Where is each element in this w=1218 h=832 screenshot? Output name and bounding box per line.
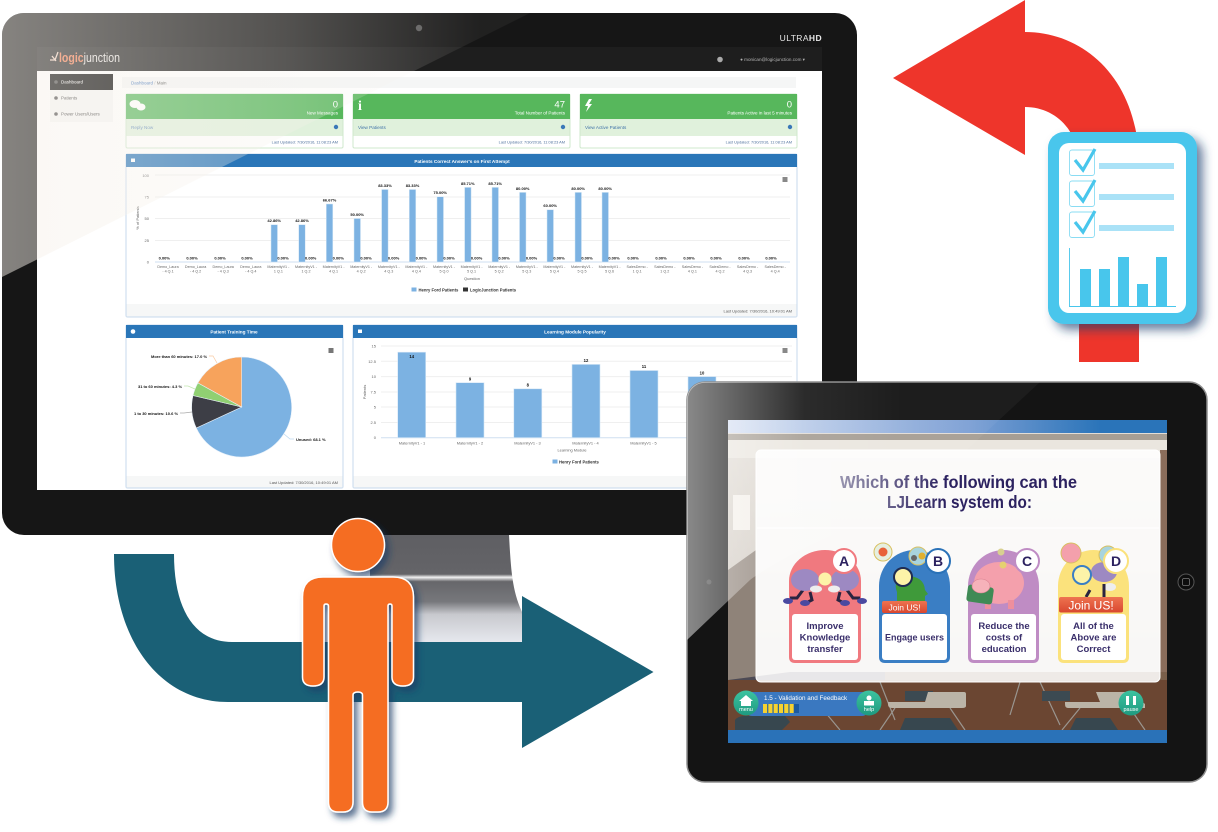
classroom desks xyxy=(735,682,1145,730)
panel: patients correct answers chart: % of Patients xyxy=(135,206,140,230)
answer letter B: B xyxy=(933,553,943,569)
arrow: red curved arrow xyxy=(893,0,1139,362)
screen background xyxy=(37,70,822,490)
panel: patients correct answers chart xyxy=(126,154,797,317)
y axis labels: 50 xyxy=(145,216,150,221)
x axis category labels: MaternityV1 - xyxy=(323,265,345,269)
answer card D xyxy=(1058,543,1129,663)
document page xyxy=(1059,143,1186,313)
answer text C: Reduce the xyxy=(978,621,1030,632)
x axis category labels: 5 Q.2 xyxy=(495,270,504,274)
card: total patients: Total Number of Patients xyxy=(515,110,566,116)
y axis labels xyxy=(368,344,377,440)
user menu: ● monican@logicjunction.com ▾ xyxy=(740,57,806,62)
answer text C: costs of xyxy=(986,632,1023,644)
x axis category labels: SalesDemo - xyxy=(654,265,676,269)
x axis labels: MaternityV1 - 2 xyxy=(457,440,483,446)
arrow: teal curved arrow xyxy=(114,554,654,748)
bar value labels: 0.00% xyxy=(471,256,483,260)
pie labels: 1 to 30 minutes: 10.6 % xyxy=(134,411,178,416)
bar value labels: 0.00% xyxy=(333,256,344,260)
x axis category labels: Demo_Laura xyxy=(240,265,262,269)
bar value labels: 42.86% xyxy=(267,218,281,223)
x axis category labels: 1 Q.2 xyxy=(660,270,669,274)
pie connectors xyxy=(180,356,294,439)
x axis category labels: MaternityV1 - xyxy=(350,265,373,269)
bar value labels: 0.00% xyxy=(443,256,455,260)
card: active patients xyxy=(580,94,797,148)
pause button: pause xyxy=(1124,707,1138,713)
x axis category labels: Demo_Laura xyxy=(185,265,207,269)
panel: patient training time pie chart xyxy=(126,325,343,488)
answer letter A: A xyxy=(839,553,849,569)
pie labels: Unused: 68.1 % xyxy=(296,437,326,442)
card: new messages xyxy=(126,94,343,148)
bar value labels: 66.67% xyxy=(323,198,337,202)
bar value labels: 0.00% xyxy=(710,256,722,260)
x axis category labels: - 4 Q.4 xyxy=(245,270,256,274)
tablet body xyxy=(687,382,1207,782)
tablet glass glare xyxy=(687,382,1040,640)
illustration: piggy bank xyxy=(966,548,1024,609)
x axis category labels xyxy=(157,265,787,274)
bar value labels: 0.00% xyxy=(186,256,198,260)
y axis labels: 12.5 xyxy=(368,359,377,364)
card: total patients: View Patients xyxy=(358,125,386,130)
classroom background xyxy=(728,420,1175,743)
illustration: bulb and brain xyxy=(1061,543,1117,597)
bar value labels: 80.00% xyxy=(516,186,530,191)
answer text A xyxy=(800,622,850,652)
card: total patients: 47 xyxy=(554,100,565,110)
x axis category labels: MaternityV1 - xyxy=(405,265,428,269)
answer text C xyxy=(979,622,1030,652)
bar value labels: 8 xyxy=(527,382,530,388)
menu button: menu xyxy=(739,707,753,713)
bar value labels: 50.00% xyxy=(350,212,364,217)
bar value labels: 0.00% xyxy=(738,256,750,260)
x axis category labels: SalesDemo - xyxy=(737,265,759,269)
pie labels: More than 60 minutes: 17.0 % xyxy=(151,354,207,359)
x axis category labels: 4 Q.2 xyxy=(357,270,366,274)
answer text D: Above are xyxy=(1071,632,1116,644)
x axis category labels: MaternityV1 - xyxy=(543,265,566,269)
card: total patients: i xyxy=(358,99,362,114)
answer text A: transfer xyxy=(807,644,843,655)
x axis category labels: MaternityV1 - xyxy=(461,265,483,269)
bar value labels: 0.00% xyxy=(655,256,667,260)
answer letter D: D xyxy=(1111,553,1121,569)
card: active patients: Last Updated: 7/30/2016, 11:08:23 AM xyxy=(726,140,792,144)
x axis category labels: 5 Q.1 xyxy=(467,270,476,274)
x axis labels: MaternityV1 - 1 xyxy=(399,440,425,446)
breadcrumb: Dashboard / Main xyxy=(131,80,167,86)
pie labels xyxy=(134,354,326,442)
answer text A: Knowledge xyxy=(800,632,850,644)
icon: checklist and chart document xyxy=(1048,132,1197,324)
tablet xyxy=(687,382,1207,782)
x axis category labels: 4 Q.4 xyxy=(771,270,780,274)
panel: patients correct answers chart: Question xyxy=(464,276,480,281)
grid lines xyxy=(381,346,792,422)
x axis category labels: 4 Q.4 xyxy=(412,270,421,274)
brand label: ULTRAHD xyxy=(780,33,822,43)
bar value labels: 0.00% xyxy=(581,256,593,260)
x axis category labels: 4 Q.1 xyxy=(329,270,338,274)
bar value labels: 83.33% xyxy=(378,183,392,188)
person figure xyxy=(302,518,414,812)
top navigation bar xyxy=(37,47,822,71)
answer letter C: C xyxy=(1022,553,1032,569)
x axis category labels: MaternityV1 - xyxy=(433,265,456,269)
y axis labels xyxy=(142,173,150,264)
legend: Henry Ford Patients xyxy=(559,459,599,464)
bar value labels: 0.00% xyxy=(277,256,289,260)
bar value labels: 0.00% xyxy=(683,256,695,260)
pie slices xyxy=(192,357,292,457)
bar value labels: 0.00% xyxy=(214,256,226,260)
card: new messages: Last Updated: 7/30/2016, 11:08:23 AM xyxy=(272,140,338,144)
illustration: brains and bulb xyxy=(783,569,867,606)
monitor xyxy=(2,13,857,535)
y axis labels: 100 xyxy=(142,173,150,178)
x axis category labels: 1 Q.1 xyxy=(633,270,642,274)
bar value labels: 0.00% xyxy=(627,256,639,260)
x axis category labels: 5 Q.0 xyxy=(439,270,449,274)
panel: patients correct answers chart: Last Updated: 7/30/2016, 10:49:01 AM xyxy=(724,308,792,314)
bar value labels: 60.00% xyxy=(543,203,557,208)
bar value labels: 0.00% xyxy=(553,256,565,260)
bar value labels: 80.00% xyxy=(571,186,585,191)
x axis category labels: Demo_Laura xyxy=(157,265,180,269)
bar value labels: 0.00% xyxy=(765,256,777,260)
question panel xyxy=(756,450,1160,682)
bar value labels: 42.86% xyxy=(295,218,309,223)
bar value labels xyxy=(409,354,705,388)
x axis category labels: MaternityV1 - xyxy=(488,265,511,269)
bar value labels: 14 xyxy=(409,354,415,359)
answer card A xyxy=(783,549,867,663)
x axis category labels: - 4 Q.1 xyxy=(162,270,174,274)
x axis labels: MaternityV1 - 6 xyxy=(688,440,715,446)
panel: patient training time pie chart: Last Updated: 7/30/2016, 10:49:01 AM xyxy=(270,480,338,485)
card: total patients: Last Updated: 7/30/2016, 11:08:23 AM xyxy=(499,140,565,144)
answer card C xyxy=(966,548,1039,663)
x axis category labels: 4 Q.3 xyxy=(743,270,752,274)
answer text D xyxy=(1070,622,1116,652)
x axis category labels: SalesDemo - xyxy=(709,265,731,269)
person head xyxy=(332,518,384,572)
y axis labels: 7.5 xyxy=(370,390,377,394)
bars xyxy=(271,187,608,262)
sidebar: Patients xyxy=(61,96,78,100)
dashboard screen xyxy=(37,47,822,490)
pause button xyxy=(1118,690,1144,716)
bar value labels: 9 xyxy=(469,376,472,382)
sidebar xyxy=(50,74,113,122)
y axis labels: 0 xyxy=(147,260,150,264)
card: new messages: Reply Now xyxy=(131,125,154,130)
join banner B: Join US! xyxy=(888,602,921,612)
y axis labels: 25 xyxy=(145,238,150,243)
logo: logicjunction xyxy=(59,50,120,65)
answer text C: education xyxy=(982,644,1027,655)
legend xyxy=(412,287,517,292)
bar value labels: 0.00% xyxy=(416,256,427,260)
x axis labels: Learning Module xyxy=(558,448,586,452)
x axis category labels: MaternityV1 - xyxy=(267,265,290,269)
x axis category labels: 5 Q.6 xyxy=(605,270,614,274)
monitor glass glare xyxy=(2,13,530,277)
x axis category labels: 4 Q.2 xyxy=(715,270,725,274)
bar value labels: 0.00% xyxy=(241,256,253,260)
question title: LJLearn system do: xyxy=(887,492,1032,512)
x axis category labels: 1 Q.2 xyxy=(301,270,311,274)
panel: learning module popularity bar chart xyxy=(353,325,797,488)
bar value labels: 85.71% xyxy=(488,181,502,186)
menu button xyxy=(734,690,758,716)
help button xyxy=(856,690,882,716)
bar value labels xyxy=(159,181,777,260)
x axis category labels: - 4 Q.2 xyxy=(190,270,201,274)
x axis category labels: 4 Q.3 xyxy=(384,270,393,274)
camera xyxy=(416,25,422,31)
illustration: head and bulb xyxy=(874,543,928,601)
join banner D: Join US! xyxy=(1068,598,1114,612)
answer text D: All of the xyxy=(1073,621,1114,632)
y axis labels: 75 xyxy=(145,194,150,200)
bar value labels: 10 xyxy=(700,370,705,376)
x axis category labels: MaternityV1 - xyxy=(599,265,621,269)
top blue bar xyxy=(728,420,1167,433)
checklist rows xyxy=(1070,149,1174,238)
x axis category labels: 5 Q.3 xyxy=(522,270,531,274)
card: new messages: 0 xyxy=(333,100,338,110)
monitor stand xyxy=(370,535,522,642)
home button xyxy=(1178,574,1194,590)
answer card B xyxy=(874,543,950,663)
panel: patients correct answers chart: Patients Correct Answer's on First Attempt xyxy=(414,159,510,164)
progress bar xyxy=(746,692,868,716)
pie labels: 31 to 60 minutes: 4.3 % xyxy=(138,384,182,389)
y axis labels: 15 xyxy=(372,344,377,348)
question title xyxy=(840,472,1077,512)
x axis category labels: - 4 Q.3 xyxy=(218,270,229,274)
bar value labels: 0.00% xyxy=(608,256,620,260)
card: total patients xyxy=(353,94,570,148)
bar value labels: 75.00% xyxy=(433,190,447,195)
card: active patients: 0 xyxy=(787,100,792,110)
x axis category labels: MaternityV1 - xyxy=(571,265,594,269)
card: new messages: New Messages xyxy=(307,110,339,116)
sidebar: Dashboard xyxy=(61,80,84,84)
x axis category labels: 5 Q.5 xyxy=(577,270,587,274)
help button: help xyxy=(864,707,874,713)
sidebar: Power Users/Users xyxy=(61,112,101,116)
x axis category labels: 4 Q.1 xyxy=(688,270,697,274)
monitor bezel xyxy=(2,13,857,535)
front camera xyxy=(706,580,712,584)
bar value labels: 85.71% xyxy=(461,181,475,186)
breadcrumb xyxy=(122,77,796,88)
x axis category labels: SalesDemo - xyxy=(682,265,704,269)
y axis labels: 10 xyxy=(372,374,377,379)
bar value labels: 0.00% xyxy=(305,256,317,260)
progress bar: 1.5 - Validation and Feedback xyxy=(764,695,848,702)
bar value labels: 0.00% xyxy=(498,256,510,260)
x axis category labels: MaternityV1 - xyxy=(295,265,318,269)
bar value labels: 12 xyxy=(584,358,589,363)
x axis category labels: SalesDemo - xyxy=(765,265,787,269)
panel: learning module popularity bar chart: Learning Module Popularity xyxy=(544,330,606,334)
card: active patients: Patients Active in last 5 minutes xyxy=(727,110,793,116)
bar value labels: 0.00% xyxy=(388,256,400,260)
mini bar chart xyxy=(1070,248,1176,306)
card: active patients: View Active Patients xyxy=(585,125,627,130)
x axis category labels: Demo_Laura xyxy=(213,265,235,269)
x axis labels: MaternityV1 - 3 xyxy=(514,440,541,446)
y axis labels: 0 xyxy=(374,435,377,440)
y axis labels: 2.5 xyxy=(370,420,377,425)
legend: Henry Ford Patients xyxy=(418,287,459,292)
bars xyxy=(398,352,716,438)
bar value labels: 0.00% xyxy=(159,256,170,260)
x axis labels: MaternityV1 - 5 xyxy=(630,440,657,446)
answer text B: Engage users xyxy=(885,632,944,642)
x axis category labels: MaternityV1 - xyxy=(516,265,539,269)
grid lines xyxy=(155,175,790,240)
x axis category labels: 5 Q.4 xyxy=(550,270,559,274)
player controls xyxy=(734,690,1144,716)
notification indicator xyxy=(717,57,723,62)
y axis labels: 5 xyxy=(374,404,377,410)
document frame xyxy=(1048,132,1197,324)
person body xyxy=(302,577,414,812)
question title: Which of the following can the xyxy=(840,472,1077,492)
answer text A: Improve xyxy=(807,621,843,632)
bar value labels: 0.00% xyxy=(526,256,538,260)
bar value labels: 11 xyxy=(642,364,647,369)
panel: learning module popularity bar chart: Patients xyxy=(362,385,367,399)
x axis labels: MaternityV1 - 4 xyxy=(572,440,600,446)
legend: LogicJunction Patients xyxy=(470,287,517,292)
x axis category labels: SalesDemo - xyxy=(627,265,649,269)
bottom blue bar xyxy=(728,730,1167,743)
x axis labels xyxy=(399,440,715,452)
tablet screen xyxy=(728,420,1175,743)
bar value labels: 83.33% xyxy=(406,183,420,188)
answer text D: Correct xyxy=(1077,644,1111,655)
x axis category labels: MaternityV1 - xyxy=(378,265,401,269)
bar value labels: 0.00% xyxy=(360,256,372,260)
x axis category labels: 1 Q.1 xyxy=(274,270,283,274)
panel: patient training time pie chart: Patient Training Time xyxy=(210,330,258,334)
bar value labels: 80.00% xyxy=(598,186,612,191)
